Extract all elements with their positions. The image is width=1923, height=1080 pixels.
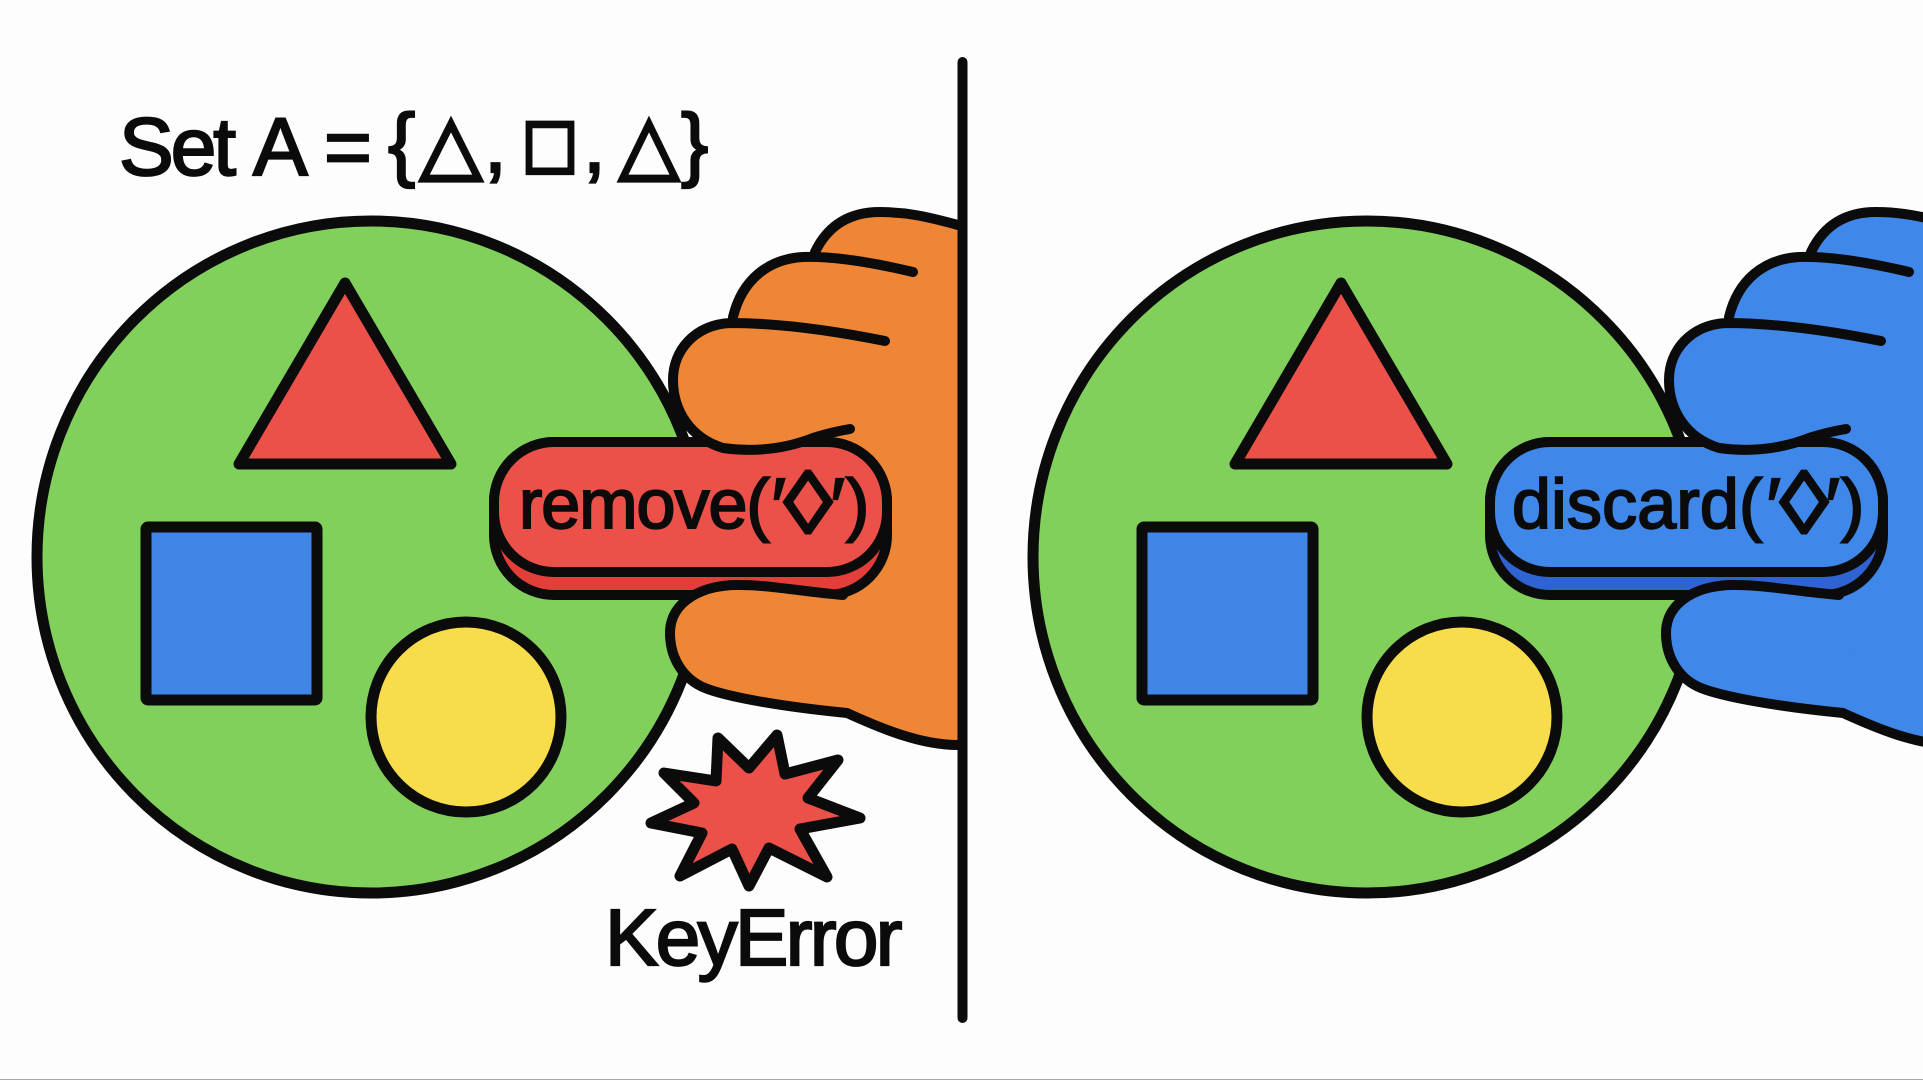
blue square [1142, 527, 1313, 700]
remove button: ′ [771, 462, 786, 553]
title: Set A [119, 97, 708, 193]
error burst [651, 735, 860, 886]
KeyError label: KeyError [605, 893, 902, 982]
centre divider [958, 62, 968, 1018]
discard button: ′ [1766, 462, 1781, 553]
red triangle [1235, 283, 1447, 464]
left hand holding remove button [494, 212, 960, 745]
remove button: ′ [830, 462, 845, 553]
left set circle [37, 221, 705, 893]
red triangle [239, 283, 451, 464]
title: Set A: } [681, 98, 708, 189]
yellow circle [1367, 622, 1557, 812]
title: Set A: { [388, 98, 415, 189]
discard button: ) [1841, 465, 1864, 543]
yellow circle [371, 622, 561, 812]
remove button: ) [846, 465, 869, 543]
right hand holding discard button [1490, 212, 1923, 745]
title: Set A: A [253, 102, 308, 193]
discard button: ′ [1825, 462, 1840, 553]
remove button: remove( [519, 465, 769, 543]
right set circle [1033, 221, 1701, 893]
discard button [1490, 442, 1883, 595]
remove button: ◊ [784, 453, 833, 552]
title: Set A: △ [619, 97, 679, 190]
discard button: ◊ [1780, 453, 1829, 552]
title: Set A: = [324, 102, 372, 193]
title: Set A: Set [119, 102, 236, 193]
title: Set A: , [583, 99, 606, 190]
remove button [494, 442, 887, 595]
title: Set A: □ [522, 104, 578, 181]
discard button: discard( [1512, 465, 1763, 543]
blue square [146, 527, 317, 700]
title: Set A: , [484, 99, 507, 190]
title: Set A: △ [420, 97, 482, 190]
